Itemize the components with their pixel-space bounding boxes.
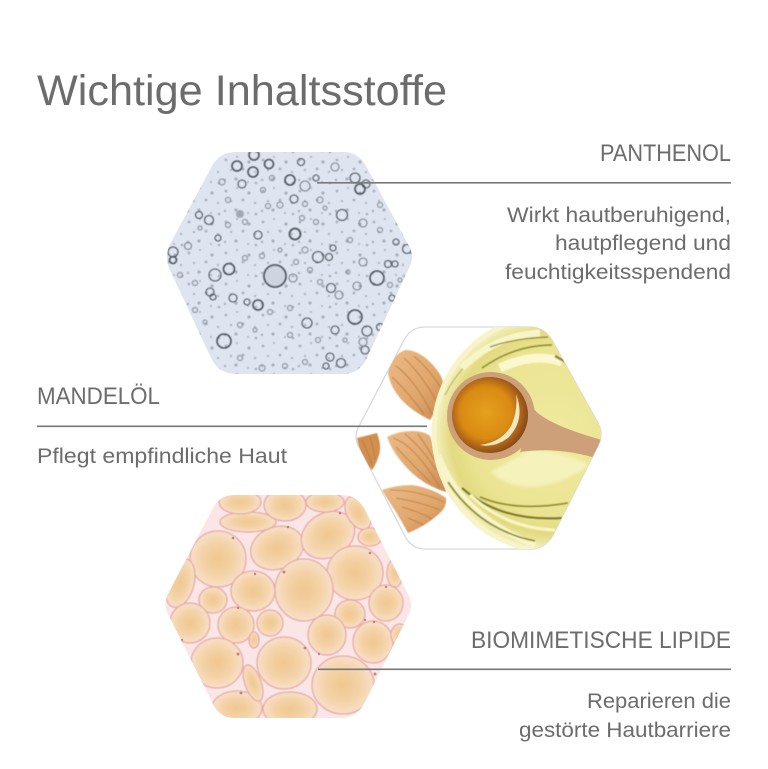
leader line: mandeloel — [37, 426, 427, 427]
leader line: panthenol — [317, 182, 731, 184]
heading: panthenol: PANTHENOL — [600, 140, 731, 167]
description: biomimetische lipide — [519, 690, 731, 742]
biomimetische lipide label — [318, 627, 731, 742]
almonds — [357, 350, 446, 533]
mandeloel label — [37, 383, 427, 468]
leader line: biomimetische lipide — [318, 668, 731, 670]
panel: panthenol bubbles hexagon — [160, 148, 420, 378]
description: panthenol: Wirkt hautberuhigend, — [507, 204, 731, 227]
large bubbles — [168, 150, 412, 369]
title: Wichtige Inhaltsstoffe — [37, 67, 447, 115]
description: panthenol — [505, 204, 731, 284]
description: biomimetische lipide: Reparieren die — [587, 690, 731, 713]
description: panthenol: hautpflegend und — [555, 232, 731, 255]
panthenol label — [317, 140, 731, 284]
small pale bubbles — [178, 176, 402, 371]
spoon bowl — [447, 372, 535, 460]
panel: lipid cells hexagon — [166, 495, 411, 718]
hexagon outline — [356, 327, 601, 549]
panel: almond oil hexagon — [355, 326, 602, 550]
oil bowl — [436, 327, 601, 548]
heading: mandeloel: MANDELÖL — [37, 383, 160, 410]
description: panthenol: feuchtigkeitsspendend — [505, 261, 731, 284]
heading: biomimetische lipide: BIOMIMETISCHE LIPIDE — [471, 627, 731, 654]
description: biomimetische lipide: gestörte Hautbarriere — [519, 719, 731, 742]
almonds and oil bowl — [356, 327, 601, 549]
honey highlight — [480, 394, 520, 446]
spoon handle — [520, 410, 600, 457]
description: mandeloel: Pflegt empfindliche Haut — [37, 445, 287, 468]
